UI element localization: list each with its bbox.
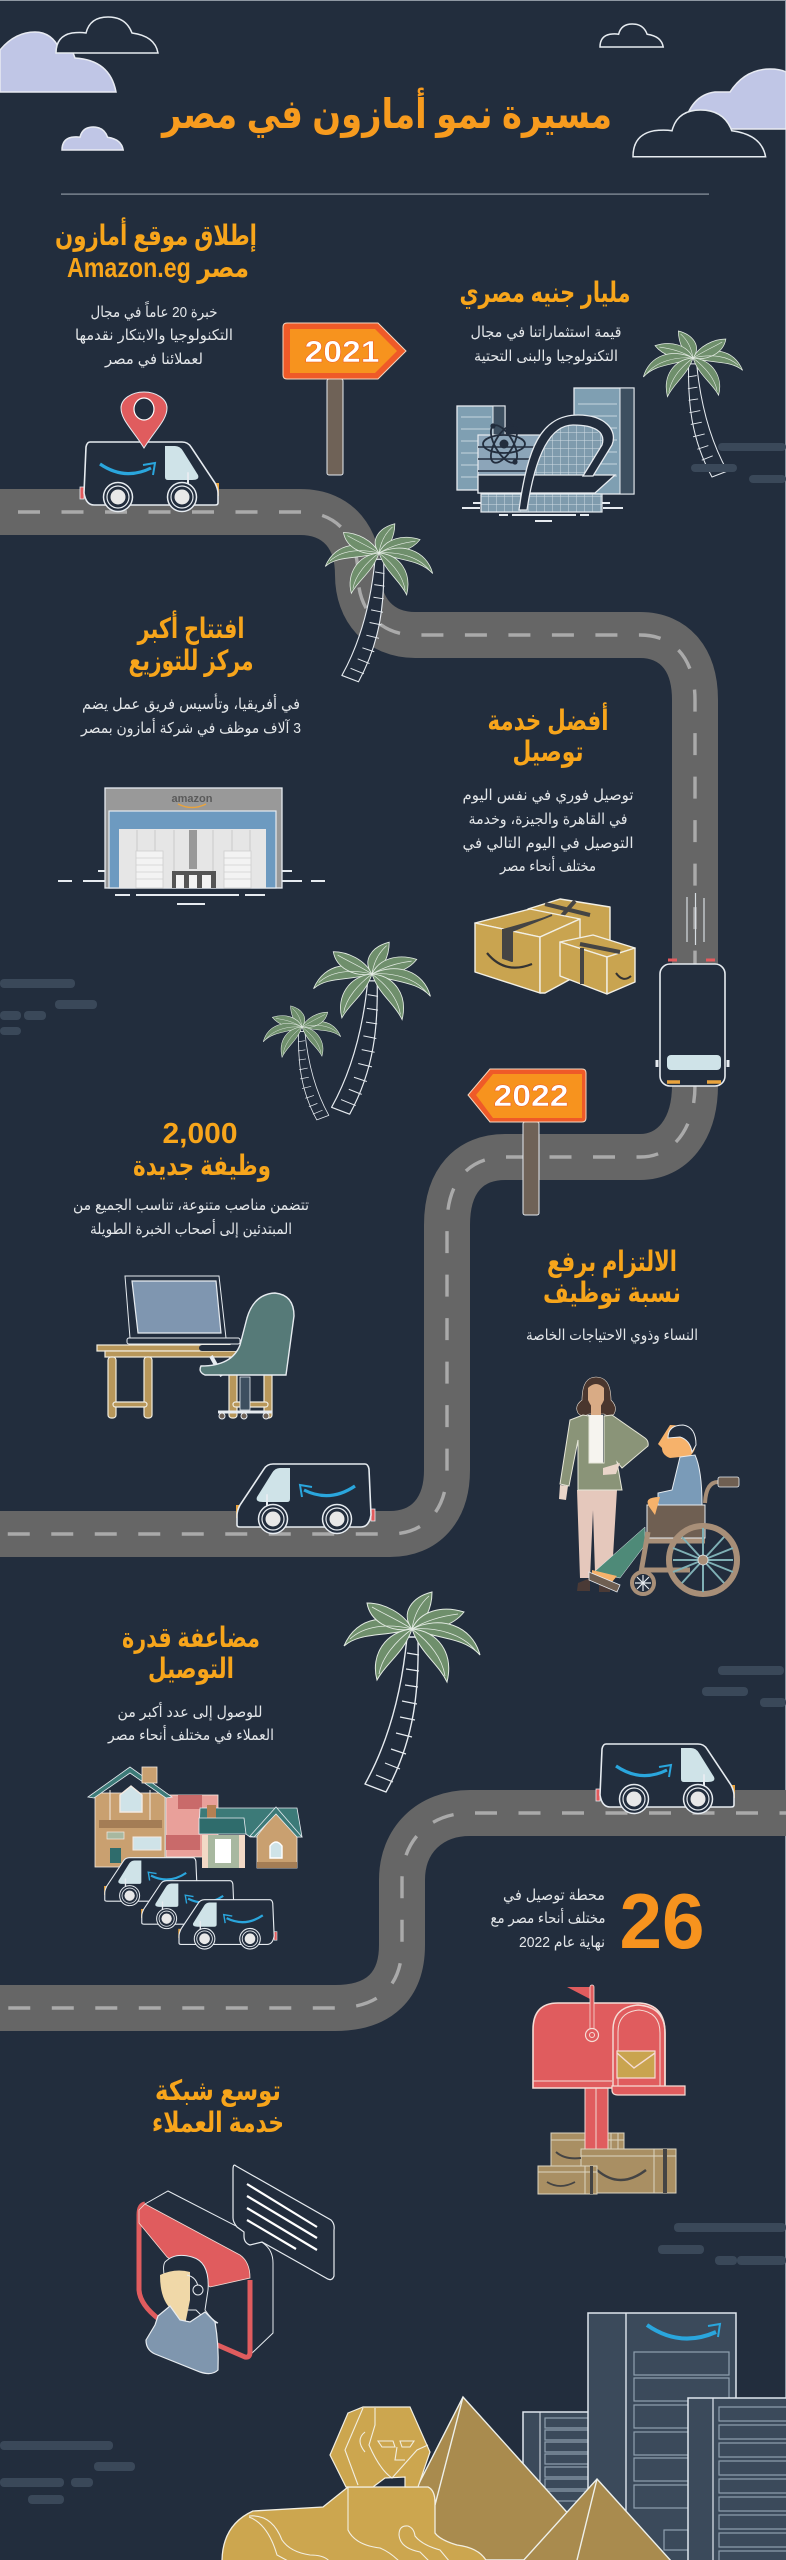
- heading: amazon.eg launch: [55, 217, 257, 284]
- heading: double delivery capacity: مضاعفة قدرة: [122, 1622, 260, 1654]
- speed bars: bottom left: [0, 2441, 135, 2504]
- text: new jobs: [73, 1197, 309, 1238]
- icon: customer service agent: [139, 2165, 334, 2374]
- text: employment commitment: النساء وذوي الاحتياجات الخاصة: [526, 1327, 698, 1345]
- text: distribution centre: 3 آلاف موظف في شركة أمازون بمصر: [80, 718, 301, 738]
- text: amazon.eg launch: [75, 301, 233, 369]
- title: مسيرة نمو أمازون في مصر: [160, 87, 612, 139]
- speed bars: middle left: [0, 979, 97, 1035]
- header divider: [61, 194, 709, 195]
- text: delivery service: في القاهرة والجيزة، وخدمة: [468, 811, 628, 829]
- text: investments: [470, 324, 622, 365]
- palm tree: top right: [643, 331, 743, 477]
- text: delivery service: التوصيل في اليوم التالي في: [462, 835, 634, 853]
- heading: employment commitment: نسبة توظيف: [543, 1277, 681, 1309]
- clouds: top right: [600, 24, 786, 157]
- road sign 2021: [283, 323, 406, 475]
- text: investments: قيمة استثماراتنا في مجال: [470, 324, 622, 342]
- speed bars: bottom right: [658, 2223, 786, 2265]
- text: delivery stations: مختلف أنحاء مصر مع: [490, 1908, 606, 1927]
- illustration: pyramids: [380, 2397, 672, 2560]
- heading: best delivery service: [488, 702, 608, 768]
- icon: amazon warehouse: [58, 788, 325, 904]
- palm tree: on road bend: [325, 524, 433, 682]
- text: delivery service: توصيل فوري في نفس اليوم: [462, 787, 634, 805]
- heading: best delivery service: أفضل خدمة: [488, 702, 608, 736]
- illustration: van fleet: [104, 1858, 277, 1949]
- heading: customer service: خدمة العملاء: [152, 2107, 284, 2138]
- heading: amazon.eg launch: إطلاق موقع أمازون: [55, 217, 257, 253]
- heading: employment commitment: الالتزام برفع: [547, 1246, 677, 1278]
- heading: double delivery capacity: التوصيل: [148, 1653, 234, 1685]
- clouds: top left: [0, 17, 158, 150]
- speed bars: top right: [691, 443, 786, 483]
- text: new jobs: تتضمن مناصب متنوعة، تناسب الجميع من: [73, 1197, 309, 1214]
- heading: largest distribution centre: [128, 610, 254, 677]
- text: delivery service: مختلف أنحاء مصر: [499, 856, 596, 875]
- heading: best delivery service: توصيل: [512, 736, 584, 768]
- van seen from above with speed lines: [657, 893, 728, 1086]
- road sign 2021: 2021: [304, 334, 380, 369]
- text: distribution centre: [80, 693, 301, 738]
- heading: largest distribution centre: مركز للتوزيع: [128, 645, 254, 677]
- illustration: office towers: [523, 2313, 786, 2560]
- text: delivery stations: [490, 1887, 606, 1951]
- road: upper section: [0, 512, 695, 1534]
- heading: double delivery capacity: [122, 1622, 260, 1685]
- text: delivery service: [462, 787, 634, 875]
- illustration: houses: [88, 1767, 302, 1868]
- road: lower section: [0, 1813, 786, 2008]
- van driving left: [236, 1464, 375, 1534]
- heading: one billion pounds: مليار جنيه مصري: [460, 277, 630, 309]
- van on lower road: [596, 1744, 735, 1814]
- road sign 2022: [468, 1069, 586, 1215]
- illustration: woman and man in wheelchair: [559, 1377, 739, 1594]
- icon: technology buildings: [457, 388, 634, 521]
- text: delivery stations: نهاية عام 2022: [519, 1934, 605, 1951]
- heading: 2,000 new jobs: 2,000: [162, 1118, 238, 1150]
- heading: customer service: [152, 2075, 284, 2138]
- icon: desk with monitor and chair: [97, 1276, 294, 1419]
- heading: largest distribution centre: افتتاح أكبر: [136, 610, 244, 645]
- van with location pin: [80, 392, 219, 512]
- heading: 2,000 new jobs: وظيفة جديدة: [133, 1150, 271, 1182]
- text: amazon.eg launch: لعملائنا في مصر: [104, 351, 203, 369]
- text: delivery capacity: للوصول إلى عدد أكبر من: [118, 1702, 262, 1721]
- text: distribution centre: في أفريقيا، وتأسيس فريق عمل يضم: [82, 693, 300, 714]
- stat: 26: 26: [620, 1877, 704, 1965]
- text: delivery capacity: العملاء في مختلف أنحاء مصر: [107, 1725, 274, 1745]
- text: investments: التكنولوجيا والبنى التحتية: [474, 348, 618, 365]
- road sign 2022: 2022: [494, 1078, 568, 1113]
- text: delivery capacity: [107, 1702, 274, 1745]
- icon: mailbox with parcels: [533, 1985, 685, 2194]
- text: amazon.eg launch: التكنولوجيا والابتكار نقدمها: [75, 327, 233, 344]
- text: amazon.eg launch: خبرة 20 عاماً في مجال: [90, 301, 218, 322]
- icon: amazon warehouse: amazon: [172, 793, 213, 805]
- palm trees: pair: [263, 942, 430, 1120]
- heading: employment commitment: [543, 1246, 681, 1309]
- speed bars: lower right: [702, 1666, 786, 1707]
- icon: amazon parcels: [475, 899, 635, 994]
- heading: customer service: توسع شبكة: [155, 2075, 281, 2107]
- heading: amazon.eg launch: مصر Amazon.eg: [67, 252, 249, 284]
- heading: 2,000 new jobs: [133, 1118, 271, 1182]
- illustration: sphinx: [222, 2407, 487, 2560]
- palm tree: lower: [344, 1592, 480, 1792]
- text: new jobs: المبتدئين إلى أصحاب الخبرة الطويلة: [90, 1219, 292, 1238]
- text: delivery stations: محطة توصيل في: [503, 1887, 605, 1905]
